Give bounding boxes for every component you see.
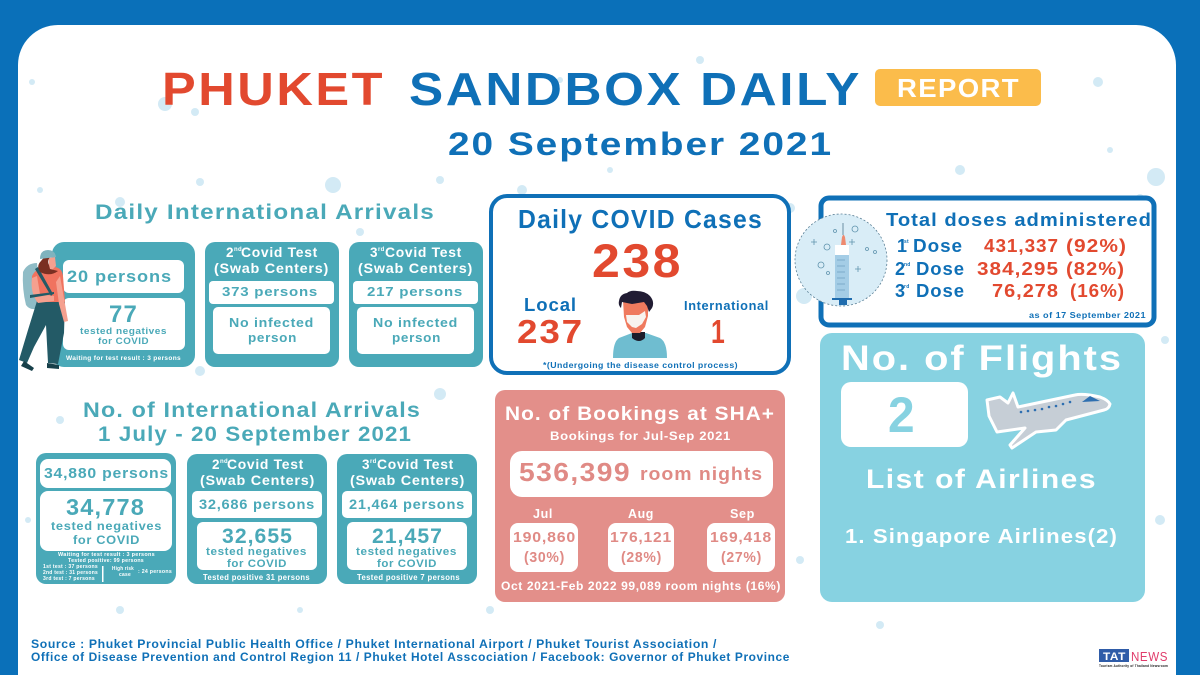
source text: Source : Phuket Provincial Public Health Office / Phuket International Airport / Phuket Tourist Association /	[31, 639, 717, 651]
panel: daily covid cases: Local	[524, 295, 577, 315]
panel: bookings at SHA+: Aug	[628, 506, 654, 521]
panel: cumulative arrivals: 34,880 persons	[44, 465, 169, 482]
heading: cumulative arrivals: 1 July - 20 September 2021	[98, 423, 412, 446]
panel: number of flights	[820, 333, 1145, 602]
panel: total doses: (16%)	[1070, 281, 1125, 301]
logo: TAT News: Tourism Authority of Thailand Newsroom	[1099, 663, 1168, 668]
panel: second test daily: (Swab Centers)	[214, 261, 329, 276]
panel: daily arrivals: Waiting for test result : 3 persons	[66, 355, 181, 362]
panel: second test daily	[205, 242, 339, 367]
logo: TAT News: TAT	[1103, 651, 1126, 663]
panel: total doses: Dose	[916, 259, 965, 279]
date: 20 September 2021	[448, 126, 833, 162]
panel: total doses: nd	[904, 262, 911, 268]
panel: bookings at SHA+: 190,860	[513, 530, 576, 546]
panel: bookings at SHA+: Sep	[730, 506, 755, 521]
panel: daily arrivals: for COVID	[98, 336, 149, 347]
panel: bookings at SHA+: (28%)	[621, 550, 662, 566]
panel: bookings at SHA+: 176,121	[610, 530, 672, 546]
panel: second test daily: Covid Test	[241, 245, 318, 260]
panel: bookings at SHA+: (30%)	[524, 550, 565, 566]
panel: cumulative arrivals: tested negatives	[51, 519, 162, 533]
panel: third test daily: 3	[370, 245, 378, 260]
panel: total doses: 76,278	[992, 281, 1059, 301]
panel: bookings at SHA+: Bookings for Jul-Sep 2021	[550, 429, 731, 443]
panel: cumulative second test: 32,686 persons	[199, 496, 315, 512]
panel: total doses: (92%)	[1066, 236, 1127, 256]
panel: cumulative third test: Covid Test	[377, 457, 454, 472]
panel: bookings at SHA+: 536,399	[519, 457, 631, 487]
panel: cumulative second test: Covid Test	[227, 457, 304, 472]
panel: total doses: Dose	[916, 281, 965, 301]
panel: second test daily: person	[248, 330, 297, 345]
icon: man with mask	[613, 291, 667, 358]
panel: cumulative second test: 32,655	[222, 525, 293, 548]
panel: bookings at SHA+: 169,418	[710, 530, 772, 546]
panel: daily covid cases: 238	[592, 234, 683, 287]
panel: total doses: 1	[897, 236, 908, 256]
panel: daily arrivals: tested negatives	[80, 326, 167, 337]
panel: bookings at SHA+: Jul	[533, 506, 553, 521]
panel: total doses: rd	[904, 284, 910, 290]
panel: third test daily: Covid Test	[385, 245, 462, 260]
logo: TAT News: NEWS	[1131, 649, 1168, 664]
panel: total doses	[821, 198, 1154, 325]
panel: cumulative second test: 2	[212, 457, 220, 472]
panel: total doses: (82%)	[1066, 259, 1125, 279]
panel: number of flights: No. of Flights	[841, 339, 1123, 378]
panel: cumulative second test: for COVID	[227, 558, 287, 570]
panel: cumulative second test: nd	[220, 459, 228, 465]
panel: cumulative third test: (Swab Centers)	[350, 473, 465, 488]
panel: second test daily: No infected	[229, 315, 314, 330]
panel: cumulative arrivals	[36, 453, 176, 584]
panel: second test daily: 2	[226, 245, 234, 260]
panel: daily covid cases: International	[684, 298, 769, 313]
panel: total doses: as of 17 September 2021	[1029, 310, 1146, 320]
panel: cumulative second test: Tested positive 31 persons	[203, 573, 310, 582]
panel: cumulative second test	[187, 454, 327, 584]
panel: total doses: 431,337	[984, 236, 1059, 256]
panel: daily arrivals: 77	[109, 301, 138, 328]
panel: cumulative third test: for COVID	[377, 558, 437, 570]
source text	[31, 639, 790, 664]
panel: number of flights: 1. Singapore Airlines(2)	[845, 526, 1118, 548]
panel: cumulative arrivals: 2nd test : 31 persons	[43, 570, 98, 576]
panel: cumulative arrivals: : 24 persons	[138, 569, 172, 575]
panel: bookings at SHA+: (27%)	[721, 550, 762, 566]
panel: third test daily: (Swab Centers)	[358, 261, 473, 276]
panel: number of flights: List of Airlines	[866, 464, 1097, 494]
report badge	[875, 69, 1041, 106]
panel: bookings at SHA+: room nights	[640, 464, 763, 484]
panel: daily covid cases: 1	[711, 313, 726, 350]
icon: traveller with backpack	[19, 250, 68, 371]
report badge: REPORT	[897, 73, 1020, 103]
panel: number of flights: 2	[888, 387, 917, 443]
panel: total doses: 3	[895, 281, 906, 301]
panel: daily covid cases	[491, 196, 789, 373]
panel: cumulative arrivals: High risk	[112, 566, 135, 572]
panel: total doses: Total doses administered	[886, 210, 1152, 230]
panel: third test daily: No infected	[373, 315, 458, 330]
panel: cumulative arrivals: 1st test : 37 persons	[43, 564, 98, 570]
panel: cumulative third test: 3	[362, 457, 370, 472]
panel: cumulative third test: Tested positive 7 persons	[357, 573, 460, 582]
icon: syringe	[795, 214, 887, 306]
panel: cumulative arrivals: Tested positive: 99 persons	[68, 558, 144, 564]
title: SANDBOX DAILY	[409, 63, 862, 115]
panel: cumulative third test: rd	[370, 459, 377, 465]
panel: cumulative arrivals: case	[119, 572, 131, 578]
source text: Office of Disease Prevention and Control Region 11 / Phuket Hotel Asscociation / Facebook: Governor of Phuket Province	[31, 652, 790, 664]
panel: total doses: 2	[895, 259, 906, 279]
panel: cumulative third test: tested negatives	[356, 546, 457, 558]
panel: cumulative arrivals: Waiting for test result : 3 persons	[58, 552, 155, 558]
panel: daily covid cases: 237	[517, 313, 584, 350]
panel: second test daily: nd	[234, 247, 242, 253]
panel: cumulative second test: tested negatives	[206, 546, 307, 558]
panel: cumulative arrivals: 3rd test : 7 persons	[43, 576, 95, 582]
panel: bookings at SHA+	[495, 390, 785, 602]
panel: bookings at SHA+: No. of Bookings at SHA+	[505, 404, 775, 425]
icon: airplane	[987, 393, 1110, 448]
panel: daily arrivals: 20 persons	[67, 267, 172, 286]
panel: daily covid cases: *(Undergoing the disease control process)	[543, 360, 738, 370]
panel: third test daily	[349, 242, 483, 367]
panel: cumulative arrivals: 34,778	[66, 494, 145, 520]
heading: daily international arrivals: Daily International Arrivals	[95, 201, 435, 224]
panel: daily covid cases: Daily COVID Cases	[518, 204, 763, 234]
title	[162, 63, 862, 115]
logo: TAT News	[1099, 649, 1168, 668]
panel: cumulative third test: 21,457	[372, 525, 443, 548]
panel: cumulative third test	[337, 454, 477, 584]
heading: cumulative arrivals: No. of International Arrivals	[83, 399, 421, 422]
heading: cumulative arrivals	[83, 399, 421, 446]
panel: total doses: 384,295	[977, 259, 1059, 279]
title: PHUKET	[162, 63, 385, 115]
panel: total doses: st	[904, 239, 909, 245]
panel: cumulative arrivals: for COVID	[73, 533, 140, 547]
panel: third test daily: person	[392, 330, 441, 345]
panel: daily arrivals	[52, 242, 195, 367]
panel: third test daily: 217 persons	[367, 284, 463, 299]
panel: third test daily: rd	[378, 247, 385, 253]
panel: bookings at SHA+: Oct 2021-Feb 2022 99,089 room nights (16%)	[501, 579, 781, 593]
panel: cumulative third test: 21,464 persons	[349, 496, 465, 512]
panel: cumulative second test: (Swab Centers)	[200, 473, 315, 488]
panel: second test daily: 373 persons	[222, 284, 318, 299]
panel: total doses: Dose	[913, 236, 963, 256]
